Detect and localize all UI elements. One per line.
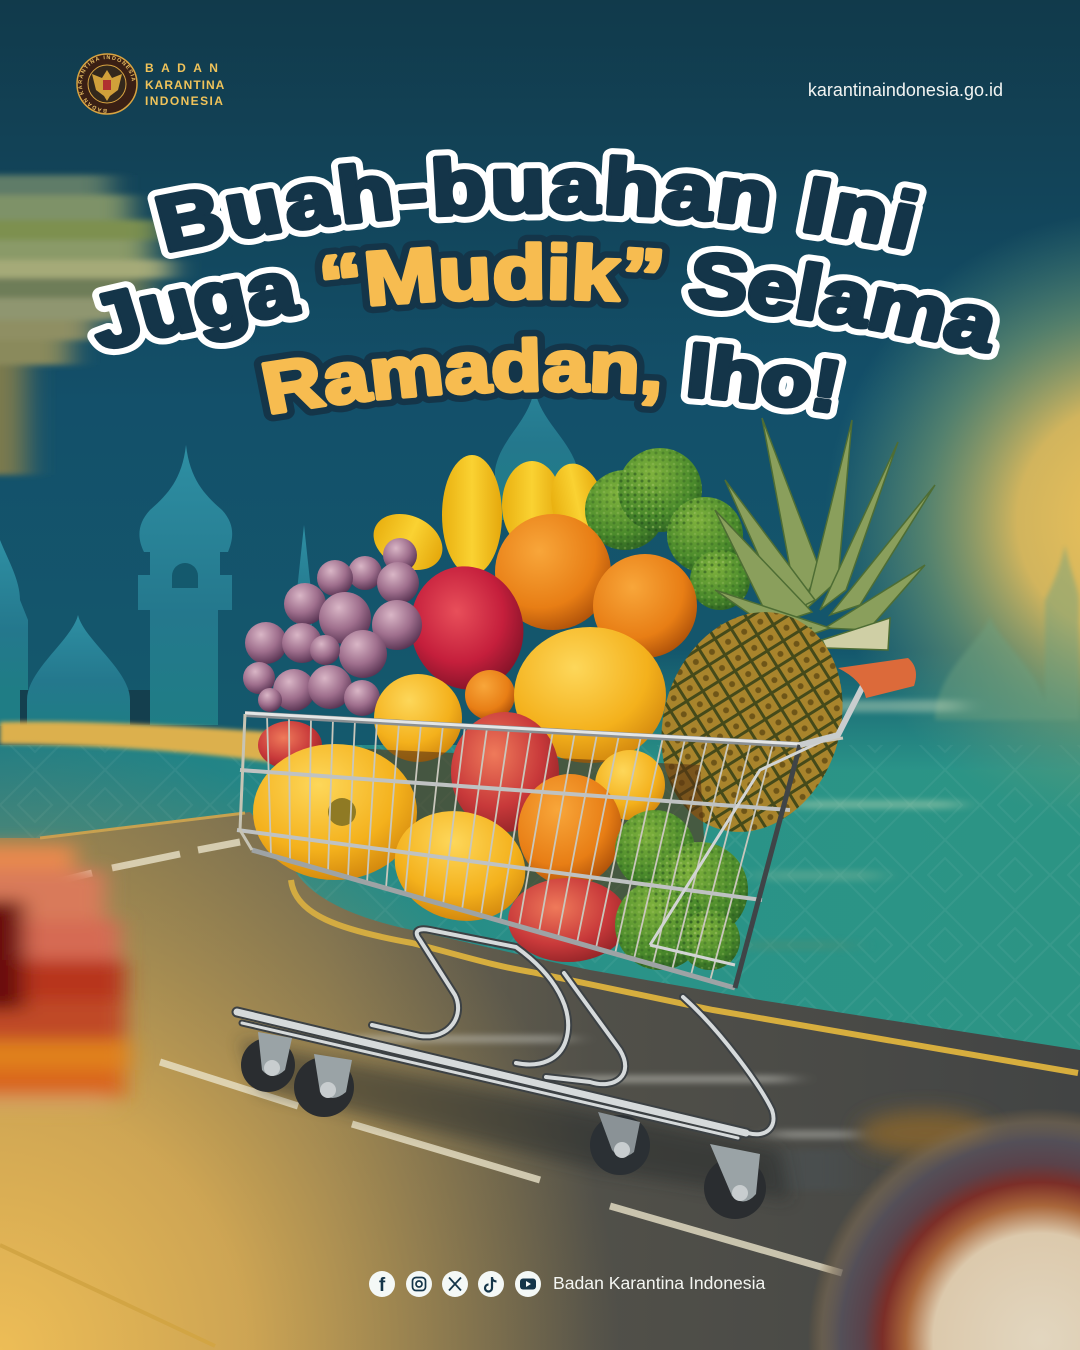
teal base far left [0, 690, 20, 726]
blurred mangosteen bottom right [790, 1100, 1080, 1350]
cart handle [800, 658, 916, 745]
orange top [495, 514, 611, 630]
big lemon left [253, 744, 417, 880]
cart shadow [240, 1040, 790, 1200]
chassis chrome tubes [237, 929, 773, 1138]
basket wires [237, 713, 843, 988]
sea [0, 745, 1080, 1060]
title line 2 outline: Juga “Mudik” Selama [87, 234, 1000, 360]
left bottom gold overlay [0, 730, 620, 1350]
broccoli lower [615, 810, 748, 970]
sea top fade on the right [640, 650, 1080, 770]
dark basket interior [290, 745, 710, 950]
orange lower [518, 774, 622, 886]
logo wordmark: KARANTINA [145, 78, 225, 92]
pineapple [634, 418, 935, 856]
website url: karantinaindonesia.go.id [808, 80, 1003, 100]
left small dome [27, 615, 130, 725]
wheel front right [294, 1054, 354, 1117]
far left tower [0, 540, 28, 690]
pineapple crown [715, 418, 935, 660]
chassis shadow tubes [237, 929, 773, 1138]
left minaret [138, 445, 232, 725]
motion streaks [340, 700, 960, 1190]
apple lower [508, 878, 628, 962]
grapes [243, 538, 422, 716]
blurred mangosteen tan rim [859, 1111, 991, 1155]
wheel front left [241, 1032, 295, 1092]
social footer [369, 1271, 765, 1297]
logo [76, 53, 225, 115]
icon: youtube [515, 1271, 541, 1297]
dark base behind small dome [20, 690, 150, 725]
icon: facebook: f [379, 1275, 386, 1296]
yellow peach [374, 674, 462, 762]
logo wordmark [145, 61, 225, 108]
footer account name: Badan Karantina Indonesia [553, 1273, 765, 1293]
lemon lower [382, 797, 538, 935]
lower orange back [465, 670, 515, 720]
mosque window [172, 563, 198, 588]
small yellow fruit [595, 750, 665, 820]
right tower [1045, 545, 1079, 720]
icon: tiktok [478, 1271, 504, 1297]
icon: facebook [369, 1271, 395, 1297]
road shoulder line [40, 813, 245, 838]
mosque silhouettes [0, 330, 578, 725]
road [0, 812, 1080, 1350]
gold beach band [0, 722, 270, 762]
right faded mosque silhouettes [935, 545, 1079, 720]
wheel rear left [590, 1112, 650, 1175]
wheel rear right [704, 1144, 766, 1219]
road lane dashes [55, 842, 842, 1273]
title line 1: Buah-buahan Ini [154, 154, 920, 253]
red apple [397, 554, 537, 702]
bananas [364, 455, 612, 581]
orange right [593, 554, 697, 658]
blurred palm top left [0, 175, 170, 475]
logo emblem: BADAN KARANTINA INDONESIA [78, 55, 136, 113]
bottom left road edge line [0, 1245, 215, 1346]
thin spire [296, 525, 312, 660]
pale apple at rim [258, 721, 322, 769]
sea lattice pattern [0, 745, 1080, 1060]
logo wordmark: BADAN [145, 61, 225, 75]
logo wordmark: INDONESIA [145, 94, 224, 108]
icon: instagram [406, 1271, 432, 1297]
title line 1 outline: Buah-buahan Ini [148, 148, 927, 259]
broccoli top [585, 448, 750, 610]
shopping cart with fruit [237, 418, 935, 1219]
chassis [237, 929, 773, 1138]
blurred date left [0, 845, 130, 1107]
title [87, 148, 1000, 422]
title line 2: Juga “Mudik” Selama [94, 241, 993, 354]
icon: x [442, 1271, 468, 1297]
central dome behind fruit [495, 330, 578, 520]
wheels [241, 1032, 766, 1219]
big yellow citrus [514, 627, 666, 763]
right small dome [935, 615, 1048, 720]
red peach [451, 712, 559, 832]
title line 3 outline: Ramadan, lho! [254, 330, 846, 422]
title line 3: Ramadan, lho! [261, 336, 840, 415]
road yellow line [291, 880, 1078, 1073]
right golden glow [800, 200, 1080, 840]
